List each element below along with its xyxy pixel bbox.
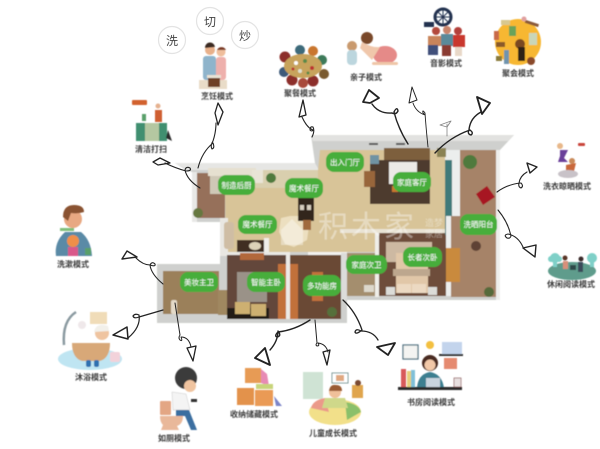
left balcony: [197, 173, 225, 218]
caption: 聚会模式: [502, 68, 534, 78]
powder room: [220, 218, 269, 256]
arrow: pale upward: [440, 121, 451, 136]
kitchen floor: [208, 170, 318, 218]
mode: study: [398, 341, 463, 407]
arrow: to washing: [122, 251, 163, 284]
arrow: to laundry: [497, 163, 537, 192]
mode: washing: [56, 205, 92, 269]
caption: 洗漱模式: [57, 259, 89, 269]
bubble: 洗: [158, 26, 186, 54]
room label: 制造后厨: 制造后厨: [222, 180, 252, 190]
room label: 多功能房: [303, 275, 341, 296]
room label: 家庭次卫: 家庭次卫: [352, 260, 382, 270]
arrow: to toilet: [175, 303, 196, 361]
room label: 美妆主卫: [180, 272, 218, 292]
mode: dining: [279, 45, 329, 98]
room label: 制造后厨: [218, 175, 255, 195]
room label: 魔术餐厅 lower: [238, 215, 277, 234]
round rug: [279, 216, 309, 247]
watermark: 积木家: [318, 211, 417, 244]
room label: 智能主卧: [247, 272, 285, 292]
TV wall: [437, 148, 460, 235]
room label: 出入门厅: 出入门厅: [330, 157, 360, 167]
arrow: to study: [343, 300, 395, 355]
living room furniture: [364, 143, 430, 204]
caption: 亲子模式: [350, 72, 382, 82]
arrow: to movie: [409, 87, 428, 147]
mode: parent-child: [347, 32, 398, 82]
arrow: to storage: [255, 320, 310, 365]
room label: 洗晒阳台: 洗晒阳台: [464, 219, 494, 229]
mode: storage: [230, 368, 282, 419]
caption: 清洁打扫: [135, 144, 167, 154]
room label: 魔术餐厅 upper: [285, 178, 323, 198]
watermark: [281, 211, 443, 245]
room label: 多功能房: 多功能房: [307, 280, 337, 290]
outer walls: [157, 135, 514, 323]
arrow: to leisure: [498, 210, 536, 257]
room label: 美妆主卫: 美妆主卫: [184, 277, 214, 287]
mode: laundry: [543, 143, 591, 191]
caption: 休闲阅读模式: [547, 279, 595, 289]
caption: 收纳储藏模式: [230, 409, 278, 419]
bubble: 炒: 炒: [239, 29, 251, 43]
caption: 书房阅读模式: [407, 397, 455, 407]
bubble: 洗: 洗: [166, 34, 178, 48]
mode: cleaning: [132, 100, 172, 154]
caption: 聚餐模式: [284, 88, 316, 98]
room label: 魔术餐厅 upper: 魔术餐厅: [289, 183, 319, 193]
room label: 家庭客厅: 家庭客厅: [397, 177, 427, 187]
bubble: 切: [196, 8, 224, 34]
arrow: to cooking: [198, 103, 223, 168]
room label: 智能主卧: 智能主卧: [251, 277, 281, 287]
second bathroom: [341, 233, 379, 300]
arrow: to dining: [299, 100, 314, 137]
mode: party: [494, 16, 541, 78]
arrow: to child growth: [315, 320, 330, 365]
mode: child growth: [303, 372, 363, 438]
room label: 魔术餐厅 lower: 魔术餐厅: [242, 219, 273, 229]
floor plan: [157, 135, 514, 323]
room label: 出入门厅: [326, 152, 364, 172]
caption: 音影模式: [430, 58, 462, 68]
room label: 洗晒阳台: [460, 214, 497, 235]
watermark: 造梦: [425, 217, 443, 228]
room label: 长者次卧: 长者次卧: [408, 252, 438, 262]
dining table: [298, 197, 314, 230]
partition walls: [226, 229, 446, 256]
right balcony: [446, 150, 496, 297]
mode: leisure reading: [547, 253, 597, 289]
watermark: 家居: [425, 228, 443, 239]
master bedroom: [227, 253, 286, 319]
living and dining floor: [225, 150, 446, 252]
kitchen counter: [193, 168, 276, 218]
arrow: to bathing: [113, 310, 163, 339]
bubble: 炒: [232, 22, 258, 48]
arrow: to cleaning: [153, 158, 200, 188]
room label: 家庭次卫: [346, 255, 387, 274]
mode: toilet: [158, 367, 197, 443]
caption: 洗衣晾晒模式: [543, 181, 591, 191]
caption: 烹饪模式: [201, 91, 233, 101]
arrow: to parent-child: [363, 90, 408, 144]
bubble: 切: 切: [204, 15, 216, 29]
room label: 家庭客厅: [393, 172, 431, 192]
caption: 如厕模式: [158, 433, 190, 443]
mode: bathing: [58, 312, 122, 382]
room label: 长者次卧: [403, 247, 442, 267]
mode: movie: [424, 9, 465, 68]
caption: 沐浴模式: [75, 372, 107, 382]
mode: cooking: [199, 42, 233, 101]
second bedroom: [379, 233, 446, 296]
caption: 儿童成长模式: [309, 428, 357, 438]
left master bath: [163, 271, 227, 315]
arrow: to party: [435, 97, 490, 153]
corridor wall: [286, 252, 290, 319]
multi-function room: [290, 255, 341, 319]
